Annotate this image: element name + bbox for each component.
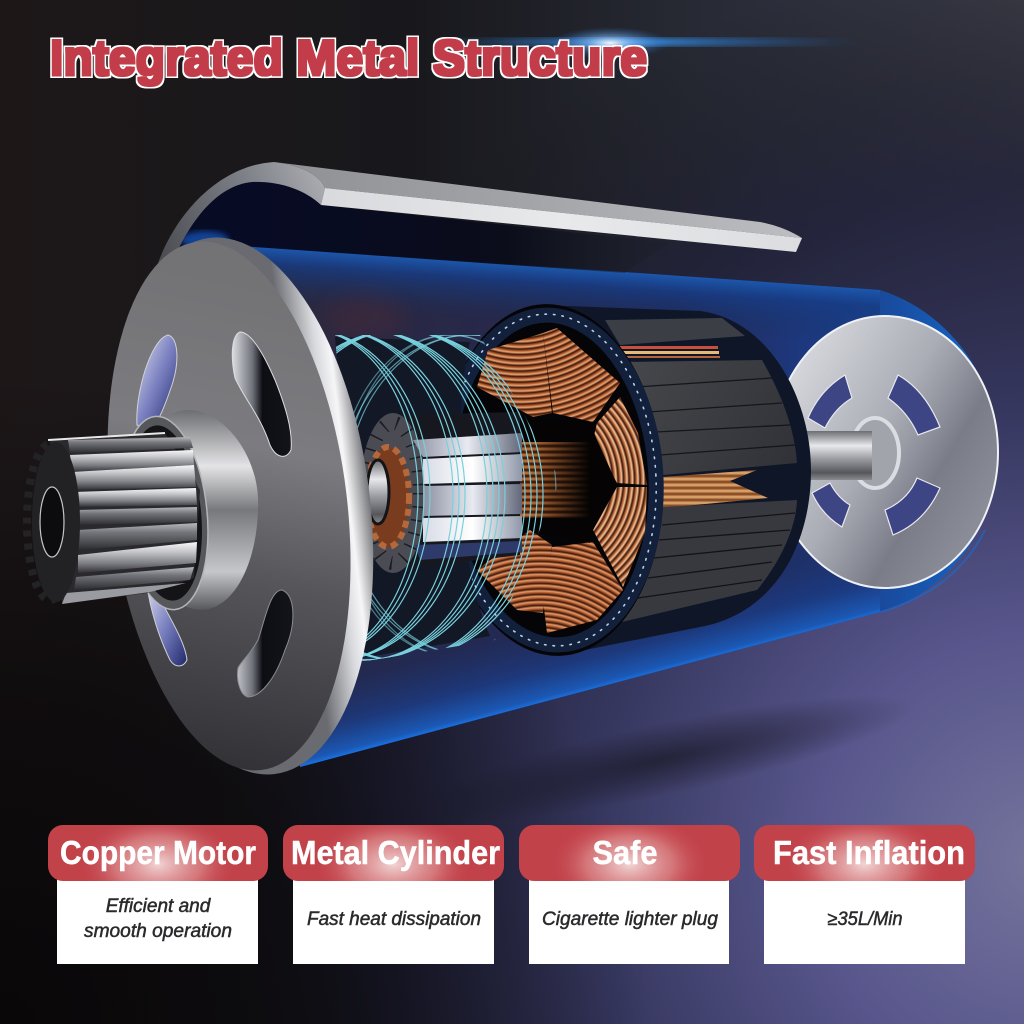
motor illustration [27, 162, 998, 849]
gear shaft [48, 433, 200, 604]
gear face [27, 442, 80, 602]
flap front strip [321, 188, 802, 252]
feature card: copper motor: Efficient and [106, 896, 212, 917]
feature card: metal cylinder: Metal Cylinder [291, 834, 500, 871]
rotor laminations [395, 412, 520, 570]
stator end ring [432, 298, 672, 662]
feature card: fast inflation: ≥35L/Min [828, 909, 902, 930]
cylinder shadow [398, 671, 922, 849]
feature card: metal cylinder [283, 825, 504, 964]
motor shaft [367, 460, 389, 524]
coil backing [335, 337, 490, 658]
lens flare [440, 27, 860, 59]
hub collar [150, 410, 258, 610]
title: Integrated Metal Structure [50, 30, 647, 86]
copper gap [663, 470, 768, 508]
ring dots [439, 309, 665, 651]
feature card: safe: Safe [592, 834, 658, 871]
hub opening [113, 412, 217, 614]
lower laminate [622, 500, 797, 622]
cyan coil lines [335, 335, 556, 661]
feature card: fast inflation: Fast Inflation [773, 834, 965, 871]
commutator copper [367, 447, 409, 547]
copper strip upper [620, 346, 720, 358]
rolled metal flap [158, 162, 802, 273]
upper left slot [137, 335, 177, 430]
flap shadow interior [178, 182, 671, 273]
feature card: metal cylinder: Fast heat dissipation [307, 909, 481, 930]
feature card: copper motor [48, 825, 268, 964]
flap top face [274, 162, 802, 238]
front disc [79, 222, 402, 790]
rotor metal core [413, 433, 522, 560]
feature card: safe: Cigarette lighter plug [542, 909, 718, 930]
lower right slot [237, 590, 293, 697]
lower left slot [147, 580, 187, 666]
rotor fan [360, 413, 426, 573]
gear ridges [62, 437, 197, 604]
feature card: fast inflation [754, 825, 975, 964]
rear disc slots [808, 375, 940, 535]
rear shaft [806, 431, 872, 480]
upper laminate [622, 360, 797, 475]
rear end disc [772, 316, 998, 588]
winding core [515, 420, 617, 543]
flap curved edge [158, 162, 325, 263]
blue metal cylinder shell [240, 245, 998, 767]
upper right slot [232, 332, 291, 456]
upper dark laminate band [605, 318, 745, 345]
feature card: copper motor: smooth operation [84, 921, 232, 942]
feature card: copper motor: Copper Motor [60, 834, 256, 871]
feature card: safe [519, 825, 740, 964]
rotor and commutator [335, 337, 522, 658]
disc rim [82, 222, 402, 790]
top shaft highlight [48, 433, 165, 440]
rear collar [851, 418, 899, 488]
disc face [79, 228, 379, 784]
stator body [540, 305, 811, 655]
copper windings [477, 328, 647, 633]
gear bore [40, 487, 64, 557]
